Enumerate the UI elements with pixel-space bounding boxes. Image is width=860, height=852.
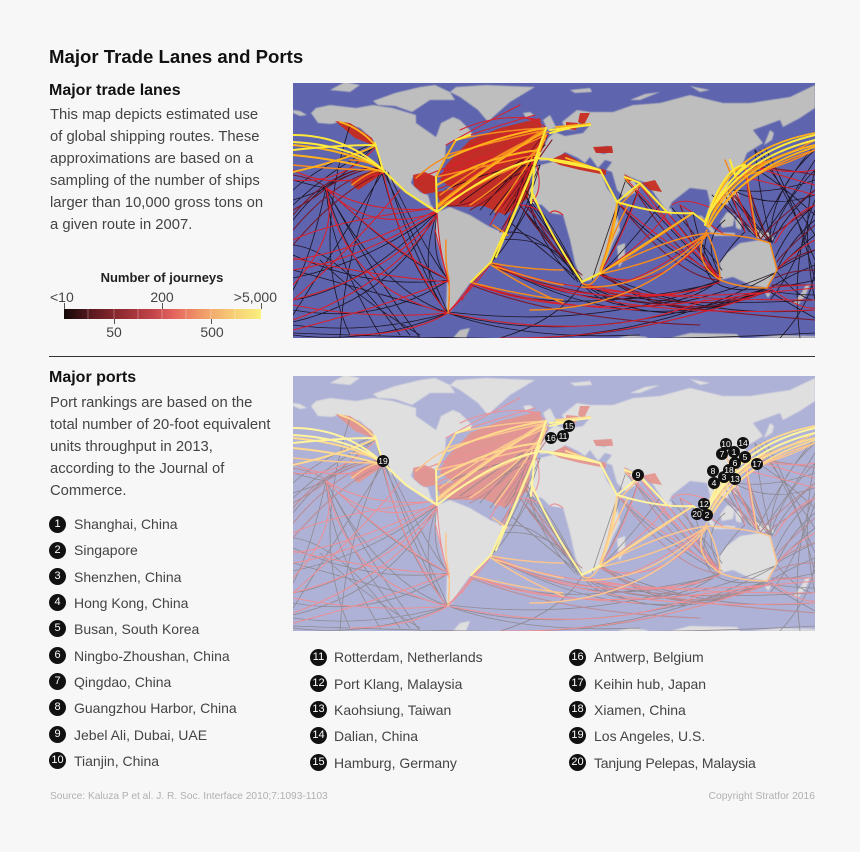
port 18: Xiamen, China bbox=[594, 702, 686, 718]
port 11: 11 bbox=[313, 651, 324, 663]
ocean background bbox=[293, 376, 815, 631]
port markers: 1 bbox=[732, 447, 737, 457]
text block: trade lanes description: of global shipping routes. These bbox=[50, 129, 260, 145]
port markers: 11 bbox=[559, 431, 568, 441]
port markers: 12 bbox=[699, 499, 709, 509]
port 14: Dalian, China bbox=[334, 728, 418, 744]
port 7: Qingdao, China bbox=[74, 674, 171, 690]
port markers: 7 bbox=[720, 449, 725, 459]
port 13: 13 bbox=[312, 703, 325, 715]
port 20: Tanjung Pelepas, Malaysia bbox=[594, 755, 756, 771]
port markers: 14 bbox=[738, 438, 748, 448]
land masses bbox=[293, 82, 815, 338]
port markers: 2 bbox=[705, 510, 710, 520]
map: major trade lanes bbox=[293, 83, 815, 338]
heading: major trade lanes: Major trade lanes bbox=[49, 82, 181, 99]
text block: ports description: Commerce. bbox=[50, 483, 126, 499]
map: major ports bbox=[293, 376, 815, 631]
legend colour bar bbox=[64, 309, 261, 319]
port 6: 6 bbox=[54, 649, 61, 661]
port markers: 8 bbox=[711, 466, 716, 476]
text block: trade lanes description bbox=[50, 107, 263, 233]
legend ticks and scale labels: <10 bbox=[50, 289, 74, 305]
text block: ports description bbox=[50, 395, 270, 499]
port 12: 12 bbox=[312, 677, 325, 689]
port markers: 15 bbox=[564, 421, 574, 431]
text block: trade lanes description: a given route in 2007. bbox=[50, 217, 192, 233]
port 1: Shanghai, China bbox=[74, 516, 178, 532]
port 8: Guangzhou Harbor, China bbox=[74, 700, 237, 716]
port 9: 9 bbox=[54, 728, 61, 740]
port 6: Ningbo-Zhoushan, China bbox=[74, 648, 230, 664]
port 19: 19 bbox=[571, 729, 584, 741]
shipping lanes bbox=[293, 398, 815, 632]
copyright note: Copyright Stratfor 2016 bbox=[709, 791, 815, 802]
text block: ports description: total number of 20-foot equivalent bbox=[50, 417, 270, 433]
port 20: 20 bbox=[571, 756, 584, 768]
port markers: 20 bbox=[692, 509, 702, 519]
port markers: 16 bbox=[546, 433, 556, 443]
port markers: 4 bbox=[712, 478, 717, 488]
heading: major ports: Major ports bbox=[49, 369, 136, 386]
port list: ranks 1 to 10 bbox=[49, 516, 237, 769]
text block: ports description: according to the Journal of bbox=[50, 461, 224, 477]
legend ticks and scale labels bbox=[50, 289, 277, 340]
port 5: Busan, South Korea bbox=[74, 621, 199, 637]
port markers: 18 bbox=[724, 465, 734, 475]
port markers: 19 bbox=[378, 456, 388, 466]
port 3: 3 bbox=[54, 570, 61, 582]
port 4: 4 bbox=[54, 596, 61, 608]
port 12: Port Klang, Malaysia bbox=[334, 676, 462, 692]
text block: trade lanes description: sampling of the number of ships bbox=[50, 173, 260, 189]
port 2 bbox=[49, 542, 138, 559]
port 3: Shenzhen, China bbox=[74, 569, 181, 585]
port 19: Los Angeles, U.S. bbox=[594, 728, 705, 744]
port 14: 14 bbox=[312, 729, 325, 741]
port 15: Hamburg, Germany bbox=[334, 755, 457, 771]
port 8: 8 bbox=[54, 701, 61, 713]
port list: ranks 11 to 15 bbox=[310, 649, 483, 771]
port markers: 13 bbox=[730, 474, 740, 484]
port markers: 3 bbox=[722, 472, 727, 482]
ocean background bbox=[293, 83, 815, 338]
port 10: 10 bbox=[51, 754, 64, 766]
port 10: Tianjin, China bbox=[74, 753, 159, 769]
port 1: 1 bbox=[54, 518, 61, 530]
port 5: 5 bbox=[54, 622, 61, 634]
legend ticks and scale labels: 200 bbox=[150, 289, 174, 305]
port markers: 17 bbox=[752, 459, 762, 469]
port 16: Antwerp, Belgium bbox=[594, 649, 704, 665]
port list: ranks 16 to 20 bbox=[569, 649, 756, 771]
port 11: Rotterdam, Netherlands bbox=[334, 649, 483, 665]
text block: trade lanes description: approximations are based on a bbox=[50, 151, 253, 167]
shipping lanes bbox=[293, 105, 815, 339]
port 7: 7 bbox=[54, 675, 61, 687]
port 2: Singapore bbox=[74, 542, 138, 558]
port 4: Hong Kong, China bbox=[74, 595, 188, 611]
legend ticks and scale labels: 500 bbox=[200, 324, 224, 340]
legend ticks and scale labels: 50 bbox=[106, 324, 122, 340]
text block: ports description: units throughput in 2013, bbox=[50, 439, 213, 455]
pale wash bbox=[293, 376, 815, 631]
source note: Source: Kaluza P et al. J. R. Soc. Interface 2010;7:1093-1103 bbox=[50, 791, 328, 802]
legend ticks and scale labels: >5,000 bbox=[234, 289, 277, 305]
port 2: 2 bbox=[54, 544, 61, 556]
port markers bbox=[377, 420, 763, 521]
legend title: Number of journeys bbox=[101, 270, 223, 285]
port markers: 5 bbox=[743, 452, 748, 462]
text block: trade lanes description: This map depicts estimated use bbox=[50, 107, 258, 123]
port 18: 18 bbox=[571, 703, 584, 715]
port 13: Kaohsiung, Taiwan bbox=[334, 702, 451, 718]
text block: ports description: Port rankings are based on the bbox=[50, 395, 252, 411]
title: Major Trade Lanes and Ports bbox=[49, 46, 303, 67]
port 16: 16 bbox=[571, 651, 584, 663]
port markers: 6 bbox=[733, 458, 738, 468]
text block: trade lanes description: larger than 10,000 gross tons on bbox=[50, 195, 263, 211]
land masses bbox=[293, 375, 815, 631]
legend: number of journeys bbox=[50, 270, 277, 340]
port 9: Jebel Ali, Dubai, UAE bbox=[74, 727, 207, 743]
divider bbox=[49, 356, 815, 357]
port 17: Keihin hub, Japan bbox=[594, 676, 706, 692]
port 15: 15 bbox=[312, 756, 325, 768]
port 17: 17 bbox=[571, 677, 584, 689]
port markers: 10 bbox=[721, 439, 731, 449]
port markers: 9 bbox=[636, 470, 641, 480]
